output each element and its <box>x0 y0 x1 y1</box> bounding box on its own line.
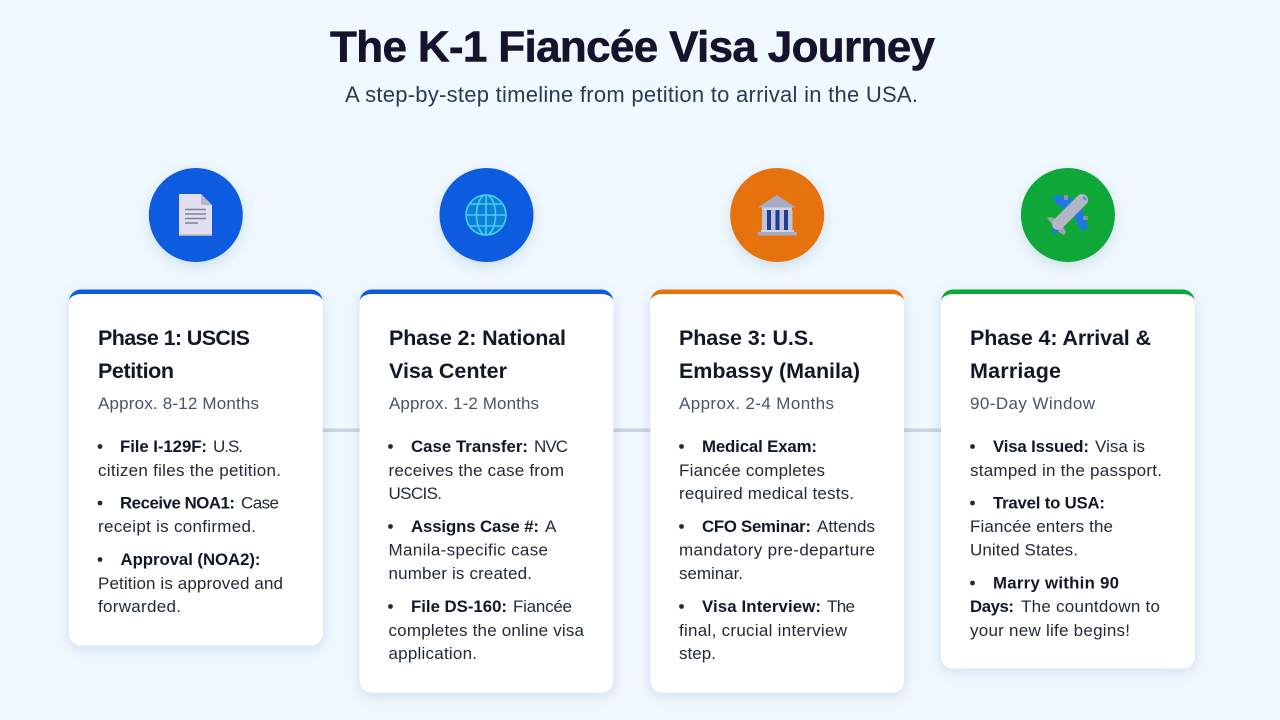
icon: globe on blue circle <box>440 168 534 262</box>
phase 4 heading: Marriage <box>970 359 1061 383</box>
step: Assigns Case #: Assigns Case #: <box>411 517 539 536</box>
title: The K-1 Fiancée Visa Journey <box>330 22 936 72</box>
phase 3 duration: Approx. 2-4 Months <box>679 394 834 413</box>
phase 2 duration: Approx. 1-2 Months <box>389 394 539 413</box>
step: Marry within 90 Days <box>970 574 1160 640</box>
step: Marry within 90 Days: your new life begins! <box>970 621 1130 640</box>
panel: phase 4 <box>941 290 1195 668</box>
step: Assigns Case # <box>388 517 557 583</box>
step: Assigns Case #: A <box>545 517 557 536</box>
step: File DS-160 <box>388 597 585 663</box>
step: Receive NOA1: Case <box>241 494 279 512</box>
step: Approval NOA2: Petition is approved and <box>98 574 283 593</box>
step: Visa Interview: step. <box>679 644 716 663</box>
step: File DS-160: completes the online visa <box>388 621 585 640</box>
step: CFO Seminar: CFO Seminar: <box>702 517 811 536</box>
step: Visa Interview: Visa Interview: <box>702 597 821 616</box>
step: Receive NOA1 <box>98 494 279 536</box>
phase 4 heading <box>970 326 1151 383</box>
step: Marry within 90 Days: Days: <box>970 597 1014 616</box>
step: Medical Exam: Fiancée completes <box>679 461 825 480</box>
step: Marry within 90 Days: Marry within 90 <box>993 574 1119 592</box>
step: Receive NOA1: Receive NOA1: <box>120 494 235 512</box>
panel: phase 1 <box>69 290 323 646</box>
step: File I-129F: citizen files the petition. <box>98 461 281 480</box>
step: Case Transfer: NVC <box>534 437 568 456</box>
phase 1 heading: Phase 1: USCIS <box>98 326 250 350</box>
step: File DS-160: application. <box>388 644 477 663</box>
step: File I-129F <box>98 437 281 480</box>
step: Assigns Case #: number is created. <box>388 564 532 583</box>
step: Case Transfer: receives the case from <box>388 461 564 480</box>
phase 3 heading <box>679 326 860 383</box>
step: Medical Exam: Medical Exam: <box>702 437 817 456</box>
phase 1 heading: Petition <box>98 359 174 383</box>
step: CFO Seminar: seminar. <box>679 564 743 583</box>
icon: airplane on green circle <box>1021 168 1115 262</box>
subtitle: A step-by-step timeline from petition to arrival in the USA. <box>345 82 918 107</box>
phase 2 heading: Phase 2: National <box>389 326 566 350</box>
step: File DS-160: Fiancée <box>513 597 572 616</box>
step: File I-129F: File I-129F: <box>120 437 207 456</box>
step: CFO Seminar: Attends <box>817 517 875 536</box>
step: Approval NOA2: forwarded. <box>98 597 181 616</box>
phase 1 heading <box>98 326 250 383</box>
step: Visa Interview: The <box>827 597 855 616</box>
step: Visa Interview: final, crucial interview <box>679 621 848 640</box>
timeline connector <box>200 428 1100 432</box>
icon: government building on orange circle <box>730 168 824 262</box>
step: Case Transfer: Case Transfer: <box>411 437 528 456</box>
step: Marry within 90 Days: The countdown to <box>1021 597 1160 616</box>
step: Travel to USA: United States. <box>970 540 1078 560</box>
panel: phase 2 <box>360 290 613 693</box>
phase 3 heading: Phase 3: U.S. <box>679 326 814 350</box>
step: Case Transfer <box>388 437 568 503</box>
step: Approval NOA2: Approval (NOA2): <box>120 550 260 569</box>
phase 1 duration: Approx. 8-12 Months <box>98 394 259 413</box>
step: Visa Interview <box>679 597 855 663</box>
step: Travel to USA <box>970 494 1113 560</box>
phase 4 heading: Phase 4: Arrival & <box>970 326 1151 350</box>
step: File I-129F: U.S. <box>213 437 243 456</box>
step: Travel to USA: Fiancée enters the <box>970 517 1113 536</box>
step: Receive NOA1: receipt is confirmed. <box>98 517 256 536</box>
phase 2 heading: Visa Center <box>389 359 508 383</box>
step: Approval NOA2 <box>98 550 283 616</box>
phase 2 heading <box>389 326 566 383</box>
step: Medical Exam: required medical tests. <box>679 484 854 503</box>
step: Visa Issued <box>970 437 1162 480</box>
step: Medical Exam <box>679 437 854 503</box>
step: Visa Issued: Visa Issued: <box>993 437 1089 456</box>
step: Visa Issued: stamped in the passport. <box>970 461 1162 480</box>
step: File DS-160: File DS-160: <box>411 597 507 616</box>
step: Assigns Case #: Manila-specific case <box>388 540 548 560</box>
step: Travel to USA: Travel to USA: <box>993 494 1105 512</box>
step: CFO Seminar <box>679 517 875 583</box>
step: CFO Seminar: mandatory pre-departure <box>679 540 875 560</box>
step: Visa Issued: Visa is <box>1095 437 1145 456</box>
panel: phase 3 <box>650 290 904 693</box>
phase 3 heading: Embassy (Manila) <box>679 359 860 383</box>
phase 4 duration: 90-Day Window <box>970 394 1096 413</box>
step: Case Transfer: USCIS. <box>388 484 442 503</box>
icon: document on blue circle <box>149 168 243 262</box>
